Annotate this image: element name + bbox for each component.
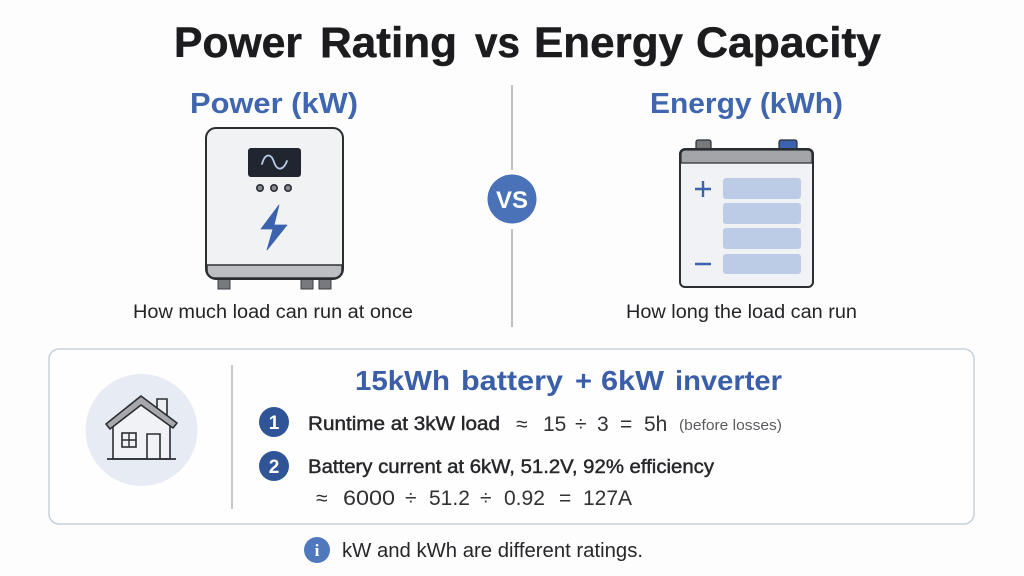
panel heading: inverter	[675, 365, 782, 396]
icon: house	[86, 374, 198, 486]
panel heading	[355, 365, 782, 396]
item 2: ÷	[405, 487, 417, 510]
item 1: 1	[269, 413, 280, 434]
item 2: 51.2	[429, 487, 470, 510]
badge: VS: VS	[496, 187, 528, 214]
icon: inverter	[206, 128, 343, 289]
item 2: ÷	[480, 487, 492, 510]
title: Energy	[534, 20, 683, 67]
heading: energy: Energy (kWh)	[650, 88, 843, 120]
item 1: =	[620, 413, 632, 436]
item 1: Runtime at 3kW load	[308, 413, 500, 435]
item 1: 3	[597, 413, 609, 436]
icon: battery	[680, 140, 813, 287]
item 2: 0.92	[504, 487, 545, 510]
panel heading: battery	[461, 365, 563, 396]
item 1: ≈	[516, 413, 528, 436]
item 1: 5h	[644, 413, 667, 436]
title	[174, 20, 881, 67]
panel: example	[49, 349, 974, 524]
item 2: =	[559, 487, 571, 510]
title: Power	[174, 20, 302, 67]
panel heading: 6kW	[601, 365, 665, 396]
badge: VS	[488, 174, 536, 224]
caption: power: How much load can run at once	[133, 302, 413, 323]
item 2: 2	[269, 457, 279, 478]
footnote: i	[315, 541, 320, 560]
center divider	[511, 85, 513, 327]
item 1: 15	[543, 413, 566, 436]
heading: power: Power (kW)	[190, 88, 358, 120]
item 2: 127A	[583, 487, 632, 510]
item 2: ≈	[316, 487, 328, 510]
item 1: (before losses)	[679, 417, 782, 434]
panel heading: 15kWh	[355, 365, 450, 396]
title: vs	[475, 20, 520, 67]
footnote: kW and kWh are different ratings.	[342, 540, 643, 562]
title: Capacity	[696, 20, 881, 67]
item 2: Battery current at 6kW, 51.2V, 92% efficiency	[308, 456, 714, 478]
title: Rating	[320, 20, 457, 67]
item 2	[259, 451, 714, 510]
item 1: ÷	[575, 413, 587, 436]
panel heading: +	[575, 365, 592, 396]
caption: energy: How long the load can run	[626, 302, 857, 323]
item 2: 6000	[343, 487, 395, 510]
item 1	[259, 407, 782, 437]
